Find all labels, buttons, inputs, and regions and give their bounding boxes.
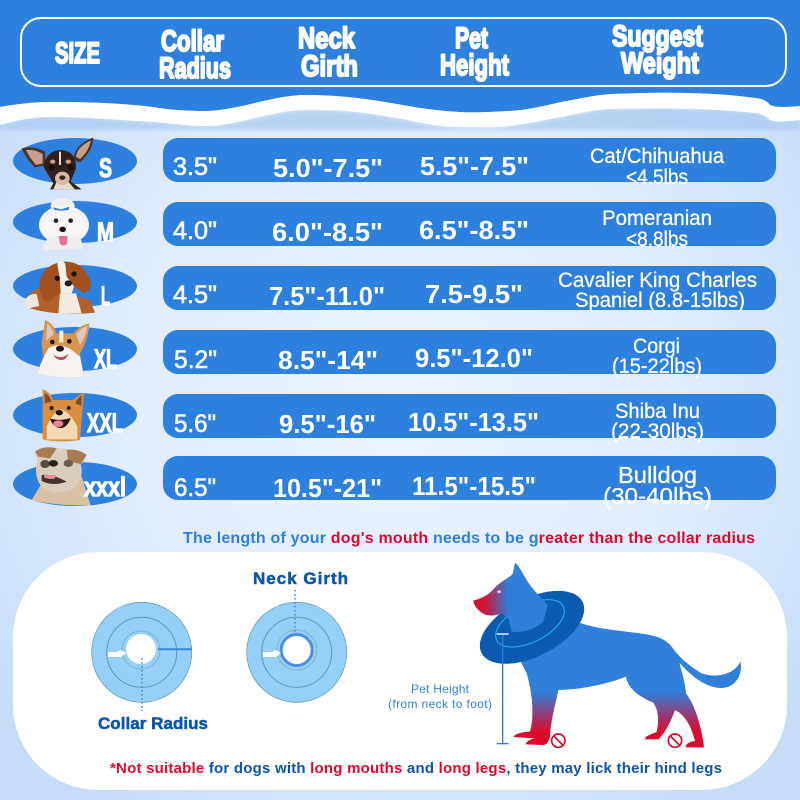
column: suggested weight values: Spaniel (8.8-15lbs) [575,289,745,312]
row: size S [13,137,137,189]
column: suggested weight values: Shiba Inu [615,400,700,423]
icon: maltese [39,198,89,250]
column: neck girth values: 9.5"-16" [279,409,376,439]
table header: Suggest [612,20,703,53]
icon: no sign rear [668,734,682,747]
column: collar radius values: 6.5" [174,474,216,502]
column: neck girth values: 5.0"-7.5" [273,153,383,183]
column: pet height values: 9.5"-12.0" [415,343,533,373]
diagram: dog wearing collar with pet height [468,563,741,747]
table header: Weight [621,47,699,80]
column: suggested weight values: Cavalier King Charles [558,269,757,292]
data bars [163,138,776,500]
collar inner ring [488,590,572,657]
icon: cavalier king charles spaniel [24,262,95,314]
column: neck girth values [269,153,385,503]
table header: Girth [301,50,358,83]
row: size XL: XL [94,344,117,374]
column: suggested weight values [558,145,757,509]
icon: chihuahua [22,137,93,189]
column: suggested weight values: <4.5lbs [626,166,688,189]
diagram: neck girth [247,569,348,702]
table header: Neck [298,22,355,55]
column: suggested weight values: (15-22lbs) [612,355,702,378]
note: mouth length: The length of your dog's mouth needs to be greater than the collar radius [183,530,755,547]
dog eye [497,590,501,593]
column: suggested weight values: Bulldog [618,462,697,488]
column: pet height values: 7.5-9.5" [425,279,523,309]
column: suggested weight values: (30-40lbs) [603,483,712,509]
icon: bulldog [32,447,91,506]
pet height line [497,634,509,744]
column: collar radius values: 5.6" [174,410,216,438]
row: size XXXL: xxxl [84,472,126,502]
table header: Radius [159,52,231,85]
icon: corgi [37,320,89,377]
row: size XXL: XXL [87,408,123,438]
column: collar radius values: 4.5" [173,281,217,309]
column: pet height values: 11.5"-15.5" [412,471,536,501]
row: size S: S [99,153,112,183]
diagram: collar radius [92,602,208,733]
row: size L [13,262,137,314]
column: suggested weight values: Cat/Chihuahua [590,145,724,168]
header wave band [0,0,800,130]
column: suggested weight values: (22-30lbs) [611,420,704,443]
table header [21,18,786,86]
row: size L: L [101,281,110,311]
column: neck girth values: 10.5"-21" [273,473,382,503]
column: collar radius values: 5.2" [174,346,217,374]
icon: no sign front [552,734,565,747]
table header: Height [440,49,509,82]
row: size XXL [13,389,137,442]
row: size XXXL [13,447,137,506]
column: collar radius values [173,153,217,502]
label: pet height [388,682,492,711]
column: neck girth values: 7.5"-11.0" [269,281,385,311]
table header: Pet [455,22,488,55]
column: pet height values: 6.5"-8.5" [419,215,529,245]
column: collar radius values: 4.0" [173,217,217,245]
label: pet height: (from neck to foot) [388,697,492,711]
column: collar radius values: 3.5" [173,153,217,181]
row: size M [13,198,137,250]
column: pet height values [408,151,539,501]
column: pet height values: 10.5"-13.5" [408,407,539,437]
column: suggested weight values: Pomeranian [602,207,712,230]
table header: Collar [161,25,224,58]
column: suggested weight values: Corgi [633,335,680,358]
diagram: collar radius: Collar Radius [98,714,208,733]
dog head [473,563,548,632]
column: suggested weight values: <8.8lbs [626,228,688,251]
column: pet height values: 5.5"-7.5" [420,151,529,181]
column: neck girth values: 6.0"-8.5" [272,217,383,247]
diagram: neck girth: Neck Girth [253,569,348,588]
column: neck girth values: 8.5"-14" [278,345,378,375]
table header: SIZE [55,37,100,70]
note: not suitable warning: *Not suitable for dogs with long mouths and long legs, they may lick their hind legs [110,760,722,777]
panel: measuring guide [13,552,787,790]
dog body [513,622,741,747]
row: size XL [13,320,137,377]
label: pet height: Pet Height [411,682,470,696]
row: size M: M [97,217,114,247]
collar [468,576,596,679]
icon: shiba inu [43,389,84,442]
